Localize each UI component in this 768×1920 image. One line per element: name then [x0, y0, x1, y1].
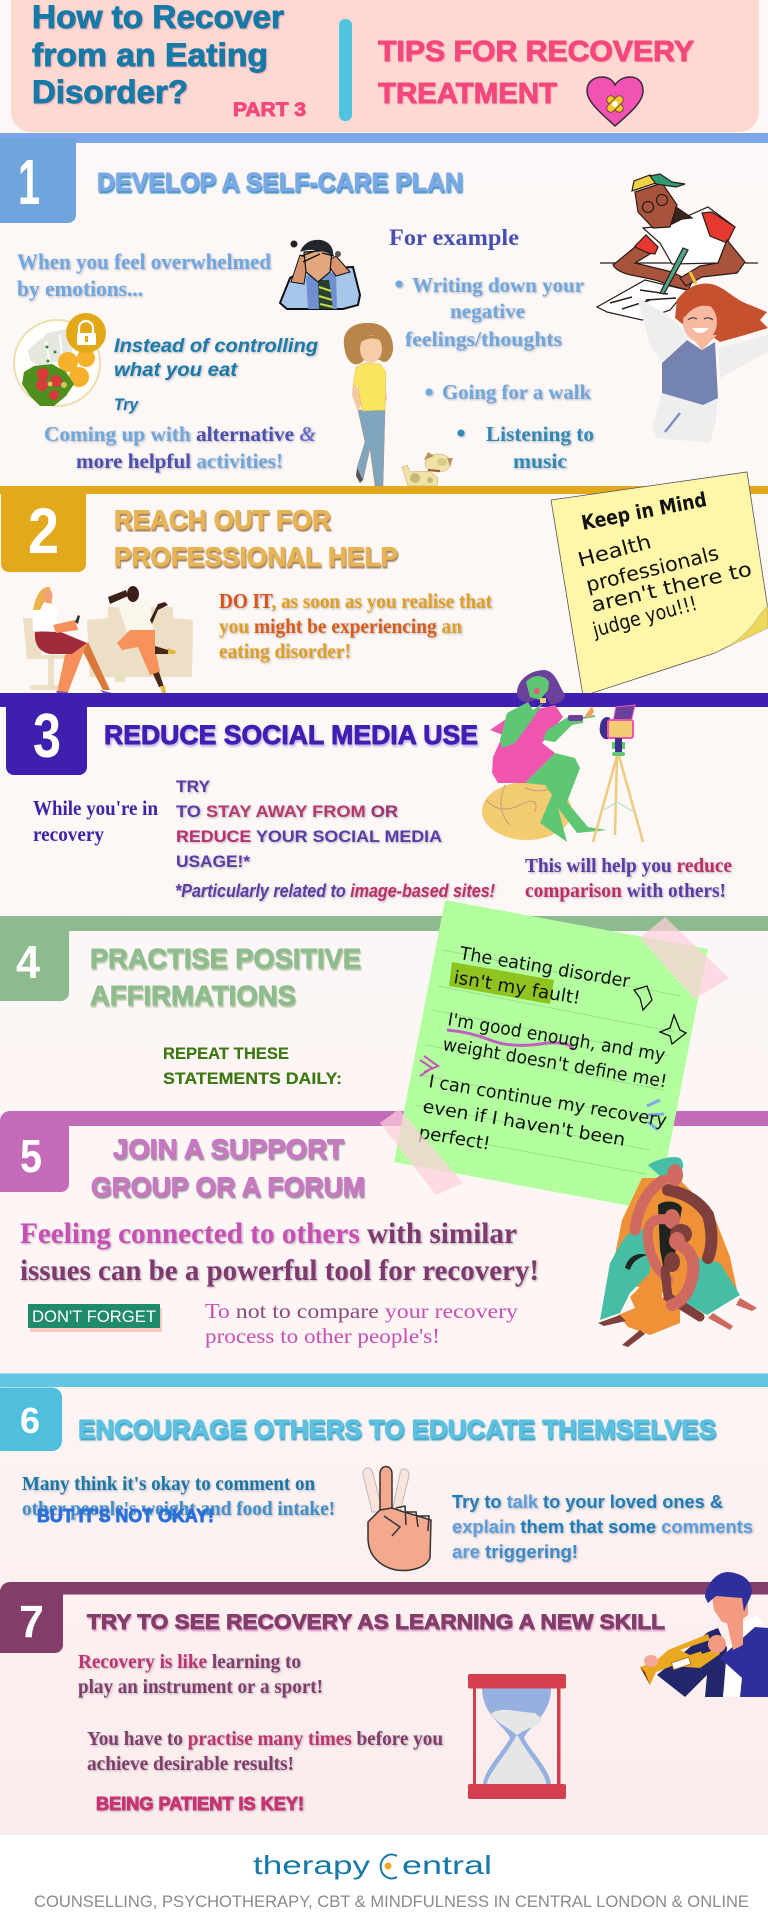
text: instead of controlling — [114, 336, 318, 414]
text: try to stay away — [176, 777, 442, 871]
panel: footer — [0, 1835, 768, 1920]
text: alternatives — [44, 422, 316, 473]
text: for example list: music — [513, 449, 567, 473]
heading 5: JOIN A SUPPORT — [113, 1134, 345, 1164]
text: do it: DO IT, as soon as you realise that — [219, 589, 493, 613]
text: talk to loved ones: Try to talk to your loved ones & — [452, 1492, 723, 1512]
number tab 7 — [0, 1590, 63, 1653]
heading 4 — [90, 943, 361, 1011]
text: feeling connected: Feeling connected to others with similar — [20, 1217, 517, 1250]
text: try to stay away: TRY — [176, 777, 211, 796]
affirmation text — [417, 943, 669, 1155]
illustration: trumpet player — [640, 1572, 768, 1697]
divider — [339, 19, 352, 121]
number tab 5: 5 — [20, 1130, 42, 1182]
text: for example list — [389, 225, 594, 473]
text: talk to loved ones: are triggering! — [452, 1542, 578, 1562]
affirmation text: The eating disorder — [457, 943, 632, 992]
icon: heart with bandage — [587, 77, 643, 126]
text: reduce comparison: comparison with others! — [525, 880, 726, 902]
heading 4: AFFIRMATIONS — [90, 980, 296, 1011]
sticky note: affirmations — [380, 900, 729, 1211]
text: reduce comparison — [525, 855, 732, 902]
text: practise many times — [87, 1728, 443, 1775]
illustration: dog — [402, 452, 453, 486]
affirmation text: perfect! — [417, 1122, 492, 1155]
panel: section 4 affirmations — [0, 916, 768, 1088]
text: try to stay away: USAGE!* — [176, 852, 250, 871]
sticky note: keep in mind: professionals — [583, 541, 721, 597]
text: feeling connected: issues can be a powerful tool for recovery! — [20, 1254, 539, 1287]
panel: section 3 social media — [0, 670, 768, 902]
affirmation text: I'm good enough, and my — [446, 1009, 667, 1066]
heading 5: GROUP OR A FORUM — [91, 1172, 365, 1202]
panel: section 5 support group — [0, 1111, 768, 1348]
subtitle: TIPS FOR RECOVERY — [378, 36, 694, 68]
affirmation text: weight doesn't define me! — [441, 1034, 669, 1092]
affirmation text: isn't my fault! — [452, 967, 582, 1009]
text: recovery is like: Recovery is like learning to — [78, 1651, 301, 1673]
logo: therapy central: entral — [402, 1850, 492, 1880]
sticky note: keep in mind — [551, 472, 768, 696]
icon: peace hand — [363, 1466, 431, 1570]
icon: padlock — [66, 313, 106, 353]
text: instead of controlling: Try — [114, 395, 139, 414]
illustration: person writing — [597, 174, 758, 320]
text: overwhelmed — [17, 249, 271, 301]
part label: PART 3 — [233, 100, 306, 121]
heading 5 — [91, 1134, 365, 1202]
text: but it's not okay: BUT IT'S NOT OKAY! — [37, 1506, 214, 1526]
illustration: happy woman with headphones — [637, 283, 768, 443]
title: from an Eating — [32, 37, 268, 73]
text: overwhelmed: When you feel overwhelmed — [17, 249, 271, 274]
text: do not compare: process to other people's! — [205, 1324, 440, 1348]
sticky note: keep in mind: Keep in Mind — [579, 487, 709, 535]
panel: section 6 educate others — [0, 1374, 768, 1570]
text: for example list: feelings/thoughts — [405, 327, 562, 351]
text: practise many times: You have to practise many times before you — [87, 1728, 443, 1750]
badge: don't forget: DON'T FORGET — [32, 1307, 156, 1326]
text: practise many times: achieve desirable results! — [87, 1753, 294, 1775]
panel: header — [11, 0, 759, 132]
text: try to stay away: TO STAY AWAY FROM OR — [176, 802, 398, 821]
heading 1: DEVELOP A SELF-CARE PLAN — [97, 167, 463, 197]
number tab 4 — [0, 925, 69, 1001]
number tab 3: 3 — [33, 702, 61, 771]
affirmation text: even if I haven't been — [421, 1096, 627, 1151]
icon: stressed man — [280, 240, 360, 309]
text: overwhelmed: by emotions... — [17, 276, 143, 301]
number tab 6: 6 — [20, 1400, 40, 1441]
text: many think: Many think it's okay to comment on — [22, 1473, 315, 1495]
tagline: COUNSELLING, PSYCHOTHERAPY, CBT & MINDFULNESS IN CENTRAL LONDON & ONLINE — [34, 1892, 749, 1911]
heading 2 — [114, 505, 398, 572]
text: alternatives: more helpful activities! — [76, 449, 283, 473]
heading 3: REDUCE SOCIAL MEDIA USE — [104, 720, 478, 750]
text: repeat statements — [163, 1044, 342, 1088]
sticky note: keep in mind: judge you!!! — [589, 591, 700, 642]
logo: therapy central: therapy — [253, 1850, 370, 1880]
text: talk to loved ones: explain them that some comments — [452, 1517, 753, 1537]
title: How to Recover — [32, 0, 284, 35]
badge: don't forget — [28, 1304, 162, 1332]
icon: plate of food — [14, 320, 100, 406]
panel: section 1 self-care plan — [0, 133, 768, 486]
illustration: woman filming make-up — [482, 670, 643, 842]
text: recovery is like — [78, 1651, 323, 1698]
text: many think: other people's weight and food intake! — [22, 1498, 335, 1520]
text: for example list: negative — [450, 299, 525, 323]
text: do it: you might be experiencing an — [219, 614, 462, 638]
panel: section 7 learning a new skill — [0, 1572, 768, 1814]
number tab 6 — [0, 1388, 62, 1451]
text: for example list: Listening to — [486, 422, 594, 446]
text: do not compare: To not to compare your recovery — [205, 1299, 519, 1323]
heading 2: PROFESSIONAL HELP — [114, 542, 398, 572]
number tab 2 — [1, 488, 86, 572]
number tab 5 — [0, 1120, 69, 1192]
text: reduce comparison: This will help you reduce — [525, 855, 732, 877]
illustration: group embrace — [598, 1157, 757, 1347]
tape pieces — [380, 917, 729, 1195]
icon: hourglass — [468, 1674, 566, 1799]
affirmation text: I can continue my recovery — [427, 1071, 669, 1132]
text: for example list: Going for a walk — [442, 380, 591, 404]
subtitle: TREATMENT — [378, 78, 557, 110]
heading 2: REACH OUT FOR — [114, 505, 331, 535]
text: instead of controlling: Instead of controlling — [114, 336, 318, 357]
text: do it — [219, 589, 493, 663]
text: do it: eating disorder! — [219, 639, 351, 663]
subtitle — [378, 36, 694, 110]
text: feeling connected — [20, 1217, 539, 1287]
text: recovery is like: play an instrument or a sport! — [78, 1676, 323, 1698]
text: repeat statements: REPEAT THESE — [163, 1044, 289, 1063]
text: for example list: For example — [389, 225, 519, 250]
text: image-based footnote: *Particularly related to image-based sites! — [175, 881, 495, 901]
number tab 7: 7 — [19, 1596, 44, 1647]
logo: therapy central — [253, 1850, 492, 1880]
text: try to stay away: REDUCE YOUR SOCIAL MEDIA — [176, 827, 442, 846]
title: Disorder? — [32, 74, 188, 110]
text: while in recovery: While you're in — [33, 796, 158, 820]
text: being patient: BEING PATIENT IS KEY! — [96, 1794, 304, 1814]
text: many think — [22, 1473, 335, 1520]
panel: section 2 professional help — [0, 472, 768, 696]
heading 6: ENCOURAGE OTHERS TO EDUCATE THEMSELVES — [78, 1414, 716, 1444]
sticky note: keep in mind: aren't there to — [589, 557, 754, 617]
number tab 4: 4 — [16, 936, 40, 988]
illustration: therapy session — [23, 586, 193, 695]
text: alternatives: Coming up with alternative & — [44, 422, 316, 446]
illustration: walking woman — [344, 323, 393, 486]
text: for example list: Writing down your — [412, 273, 584, 297]
heading 7: TRY TO SEE RECOVERY AS LEARNING A NEW SKILL — [87, 1611, 665, 1634]
text: talk to loved ones — [452, 1492, 753, 1562]
number tab 1 — [0, 138, 76, 223]
text: instead of controlling: what you eat — [114, 360, 238, 381]
number tab 3 — [6, 700, 87, 775]
text: while in recovery — [33, 796, 158, 846]
number tab 2: 2 — [28, 495, 59, 567]
text: while in recovery: recovery — [33, 822, 104, 846]
sticky note: keep in mind: Health — [575, 529, 654, 572]
title — [32, 0, 284, 110]
text: repeat statements: STATEMENTS DAILY: — [163, 1069, 342, 1088]
heading 4: PRACTISE POSITIVE — [90, 943, 361, 974]
number tab 1: 1 — [18, 146, 40, 218]
text: do not compare — [205, 1299, 519, 1348]
